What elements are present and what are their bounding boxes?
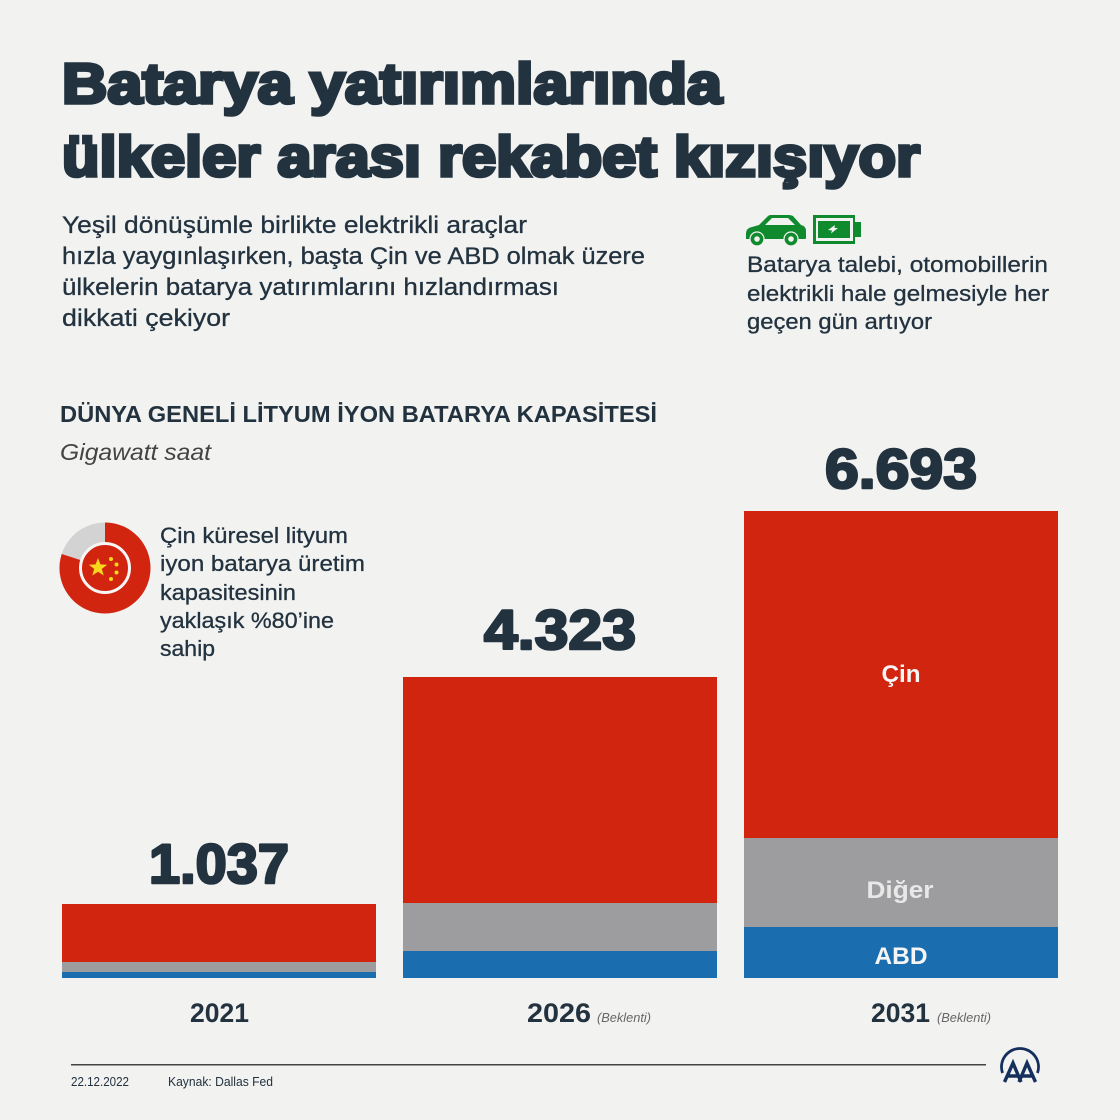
donut caption: Çin küresel lityum xyxy=(160,523,348,548)
year label: 2031 xyxy=(871,998,991,1028)
intro text: dikkati çekiyor xyxy=(62,305,230,332)
value: 2021: 1.037 xyxy=(149,832,289,895)
segment label: Çin: Çin xyxy=(882,661,920,688)
bar: 2026 xyxy=(403,677,717,978)
year label: 2031: 2031 xyxy=(871,998,930,1028)
callout: battery demand: elektrikli hale gelmesiyle her xyxy=(747,281,1050,306)
year label: 2026: 2026 xyxy=(527,998,591,1028)
donut caption: yaklaşık %80’ine xyxy=(160,608,334,633)
footer rule xyxy=(71,1064,986,1066)
year label: 2026 xyxy=(527,998,651,1028)
chart unit: Gigawatt saat xyxy=(60,439,213,465)
donut chart: China share with flag xyxy=(59,522,150,614)
title: Batarya yatırımlarında xyxy=(62,52,723,116)
value: 2031: 6.693 xyxy=(825,437,977,500)
segment label: ABD: ABD xyxy=(874,943,928,970)
logo: AA xyxy=(1002,1048,1038,1082)
footer date: 22.12.2022 xyxy=(71,1075,129,1089)
segment label: Diğer: Diğer xyxy=(866,877,934,904)
callout: battery demand: geçen gün artıyor xyxy=(747,309,933,334)
callout: battery demand xyxy=(747,252,1050,334)
year label: 2026: (Beklenti) xyxy=(597,1011,651,1025)
donut caption xyxy=(160,523,365,661)
icon: green battery xyxy=(813,215,861,244)
intro text xyxy=(62,212,645,332)
intro text: ülkelerin batarya yatırımlarını hızlandırması xyxy=(62,274,559,301)
value: 2026: 4.323 xyxy=(484,598,636,661)
title xyxy=(62,52,920,189)
intro text: Yeşil dönüşümle birlikte elektrikli araçlar xyxy=(62,212,527,239)
year label: 2021: 2021 xyxy=(190,998,249,1028)
donut caption: iyon batarya üretim xyxy=(160,551,365,576)
callout: battery demand: Batarya talebi, otomobillerin xyxy=(747,252,1048,277)
chart heading: DÜNYA GENELİ LİTYUM İYON BATARYA KAPASİTESİ xyxy=(60,401,657,427)
icon: green car xyxy=(746,215,806,246)
donut caption: sahip xyxy=(160,636,215,661)
title: ülkeler arası rekabet kızışıyor xyxy=(62,125,920,189)
footer source: Kaynak: Dallas Fed xyxy=(168,1075,273,1089)
donut caption: kapasitesinin xyxy=(160,580,296,605)
intro text: hızla yaygınlaşırken, başta Çin ve ABD olmak üzere xyxy=(62,243,645,270)
year label: 2031: (Beklenti) xyxy=(937,1011,991,1025)
bar: 2021 xyxy=(62,904,376,978)
bar: 2031 xyxy=(744,511,1058,978)
